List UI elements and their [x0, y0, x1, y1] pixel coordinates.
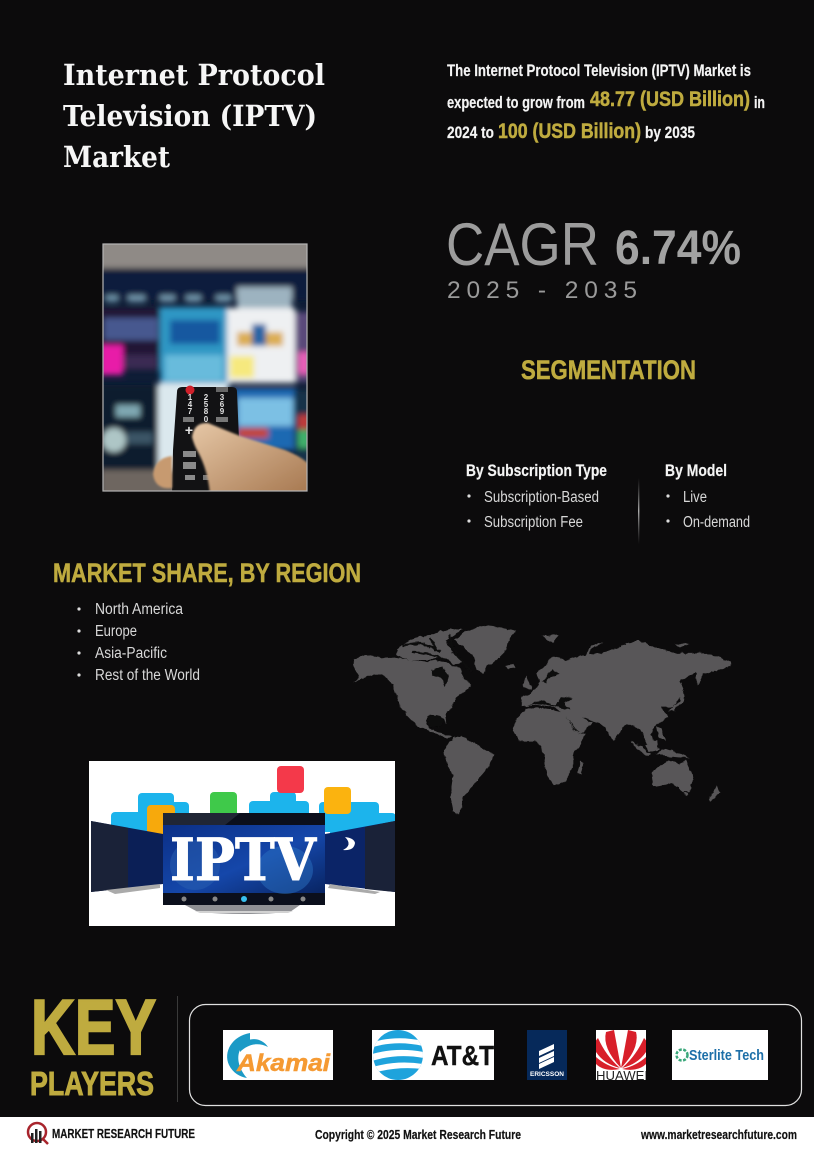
hand [192, 423, 312, 495]
market size statement: expected to grow from [447, 94, 585, 112]
heading: market share by region: MARKET SHARE, BY REGION [53, 558, 361, 588]
logo: Ericsson: ERICSSON [530, 1072, 564, 1078]
CAGR block: 6.74% [615, 222, 741, 275]
CAGR block: 2025 - 2035 [447, 277, 637, 304]
photo: IPTV televisions [89, 761, 396, 926]
photo: remote control pointed at smart TV: 0 [204, 415, 209, 424]
logo: Akamai: Akamai [236, 1050, 331, 1077]
segment: by subscription type: Subscription-Based [484, 489, 599, 506]
segment: by model: By Model [665, 462, 727, 480]
title: Internet Protocol [63, 58, 325, 92]
market size statement: in [754, 94, 765, 112]
footer bar: MARKET RESEARCH FUTURE [52, 1126, 195, 1141]
segment: by model [665, 462, 750, 531]
photo: IPTV televisions: IPTV [170, 826, 317, 894]
photo: remote control pointed at smart TV: 8 [204, 407, 209, 416]
key players panel [190, 1004, 802, 1106]
footer bar [0, 1117, 814, 1150]
segment: by subscription type [466, 462, 607, 531]
logo: Huawei: HUAWEI [596, 1069, 648, 1083]
market size statement: by 2035 [645, 124, 695, 142]
logo: Akamai [223, 1030, 333, 1080]
title: Television (IPTV) [63, 99, 317, 133]
region list [77, 601, 200, 684]
photo: remote control pointed at smart TV: + [185, 422, 193, 438]
title: Market [63, 140, 171, 174]
footer logo icon [28, 1123, 48, 1144]
CAGR block: CAGR [446, 211, 599, 278]
photo: remote control pointed at smart TV [104, 244, 306, 490]
photo: remote control pointed at smart TV: 9 [220, 407, 225, 416]
market size statement: 48.77 (USD Billion) [590, 88, 750, 111]
logo: AT&T: AT&T [431, 1040, 494, 1071]
segment: by subscription type: Subscription Fee [484, 514, 583, 531]
side screens [91, 821, 163, 892]
logo: Sterlite Tech: Sterlite Tech [689, 1047, 764, 1064]
photo: remote control pointed at smart TV: 1 [188, 393, 193, 402]
logo: AT&T [372, 1030, 494, 1080]
remote [172, 387, 239, 495]
title [63, 58, 325, 174]
logo: Sterlite Tech [672, 1030, 768, 1080]
photo: remote control pointed at smart TV: 6 [220, 400, 225, 409]
market size statement [447, 62, 765, 143]
region list: Rest of the World [95, 667, 200, 684]
segment: by subscription type: By Subscription Type [466, 462, 607, 480]
logo: Huawei [596, 1030, 646, 1080]
market size statement: 2024 to [447, 124, 494, 142]
key players heading [30, 983, 156, 1102]
photo border [103, 244, 307, 491]
key players heading: PLAYERS [30, 1065, 154, 1102]
main screen [163, 813, 325, 905]
segment: by model: On-demand [683, 514, 750, 531]
photo: remote control pointed at smart TV: 5 [204, 400, 209, 409]
app tiles [111, 792, 395, 834]
region list: North America [95, 601, 183, 618]
key players heading: KEY [31, 983, 156, 1071]
photo: remote control pointed at smart TV: 3 [220, 393, 225, 402]
segment: by model: Live [683, 489, 707, 506]
region list: Europe [95, 623, 137, 640]
heading: segmentation: SEGMENTATION [521, 355, 696, 385]
market size statement: 100 (USD Billion) [498, 120, 641, 143]
photo: remote control pointed at smart TV: 2 [204, 393, 209, 402]
photo: remote control pointed at smart TV: 4 [188, 400, 193, 409]
world map [353, 626, 731, 815]
region list: Asia-Pacific [95, 645, 167, 662]
photo: remote control pointed at smart TV: 7 [188, 407, 193, 416]
logo: Ericsson [527, 1030, 567, 1080]
CAGR block [446, 211, 741, 304]
footer bar: Copyright © 2025 Market Research Future [315, 1127, 521, 1142]
